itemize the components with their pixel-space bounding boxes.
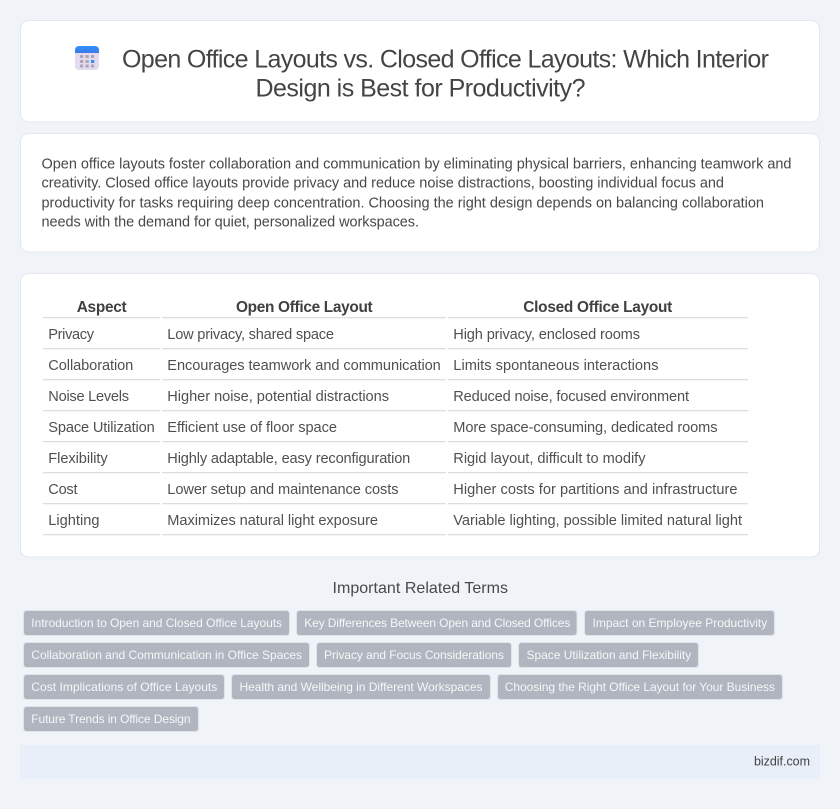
heading: related terms: Important Related Terms: [332, 580, 508, 597]
chip: privacy: Privacy and Focus Considerations: [324, 648, 504, 662]
table row: cost: Cost: [48, 482, 78, 498]
chip: cost: [24, 674, 224, 700]
chip: choosing: Choosing the Right Office Layout for Your Business: [505, 680, 775, 694]
chip: choosing: [498, 674, 782, 700]
table row: space utilization: More space-consuming, dedicated rooms: [453, 420, 718, 436]
table row: lighting: Variable lighting, possible limited natural light: [453, 513, 742, 529]
table row: cost: Higher costs for partitions and infrastructure: [453, 482, 738, 498]
table row: collaboration: Limits spontaneous interactions: [453, 358, 658, 374]
panel: summary: [20, 134, 820, 252]
chip: space: Space Utilization and Flexibility: [526, 648, 691, 662]
table row: privacy: Low privacy, shared space: [167, 327, 334, 343]
text block: summary paragraph: needs with the demand for quiet, personalized workspaces.: [42, 214, 419, 230]
chip: collaboration: [24, 642, 310, 668]
table row: privacy: Privacy: [48, 327, 95, 343]
table row: cost: [48, 482, 738, 498]
chip: space: [518, 642, 698, 668]
table row: lighting: Maximizes natural light exposure: [167, 513, 378, 529]
table row: lighting: Lighting: [48, 513, 100, 529]
table header: [77, 299, 672, 316]
table row: noise levels: Noise Levels: [48, 389, 129, 405]
chip: key differences: [296, 610, 577, 636]
table row: space utilization: Efficient use of floor space: [167, 420, 337, 436]
chip: cost: Cost Implications of Office Layouts: [31, 680, 217, 694]
title: Open Office Layouts vs. Closed Office Layouts: Which Interior: [122, 46, 769, 74]
title: [122, 46, 769, 102]
table row: collaboration: [48, 358, 659, 374]
chip: introduction: Introduction to Open and Closed Office Layouts: [31, 616, 282, 630]
text block: summary paragraph: [42, 156, 792, 230]
table row: flexibility: Highly adaptable, easy reconfiguration: [167, 451, 410, 467]
table row: noise levels: Higher noise, potential distractions: [167, 389, 389, 405]
chip: privacy: [316, 642, 512, 668]
table row: collaboration: Encourages teamwork and communication: [167, 358, 441, 374]
table row: noise levels: Reduced noise, focused environment: [453, 389, 689, 405]
text block: summary paragraph: creativity. Closed office layouts provide privacy and reduce noise distractions, boosting individual focus and: [42, 175, 724, 191]
table header: Aspect: [77, 299, 127, 316]
chip: collaboration: Collaboration and Communication in Office Spaces: [31, 648, 302, 662]
title: Design is Best for Productivity?: [256, 74, 586, 102]
related terms chips: [24, 610, 782, 732]
table row: privacy: High privacy, enclosed rooms: [453, 327, 640, 343]
table row: space utilization: [48, 420, 718, 436]
chip: health: [232, 674, 490, 700]
chip: future: Future Trends in Office Design: [31, 712, 190, 726]
chip: key differences: Key Differences Between Open and Closed Offices: [304, 616, 570, 630]
chip: productivity: Impact on Employee Productivity: [592, 616, 767, 630]
table header: Closed Office Layout: [523, 299, 672, 316]
table row: privacy: [48, 327, 640, 343]
table header: Open Office Layout: [236, 299, 373, 316]
chip: health: Health and Wellbeing in Different Workspaces: [240, 680, 482, 694]
chip: future: [24, 706, 198, 732]
table row: flexibility: Rigid layout, difficult to modify: [453, 451, 646, 467]
table row: flexibility: Flexibility: [48, 451, 108, 467]
table row: space utilization: Space Utilization: [48, 420, 155, 436]
footer: [20, 745, 820, 779]
icon: calendar: [75, 46, 99, 70]
panel: comparison table: [20, 274, 820, 557]
chip: productivity: [584, 610, 774, 636]
panel: header: [20, 20, 820, 122]
table row: flexibility: [48, 451, 646, 467]
table row: lighting: [48, 513, 742, 529]
text block: summary paragraph: Open office layouts foster collaboration and communication by eliminating physical barriers, enhancing teamwork and: [42, 156, 792, 172]
table row: collaboration: Collaboration: [48, 358, 133, 374]
footer: bizdif.com: [754, 755, 810, 769]
text block: summary paragraph: productivity for tasks requiring deep concentration. Choosing the right design depends on balancing collaboration: [42, 195, 764, 211]
chip: introduction: [24, 610, 290, 636]
table row: cost: Lower setup and maintenance costs: [167, 482, 398, 498]
table row: noise levels: [48, 389, 689, 405]
